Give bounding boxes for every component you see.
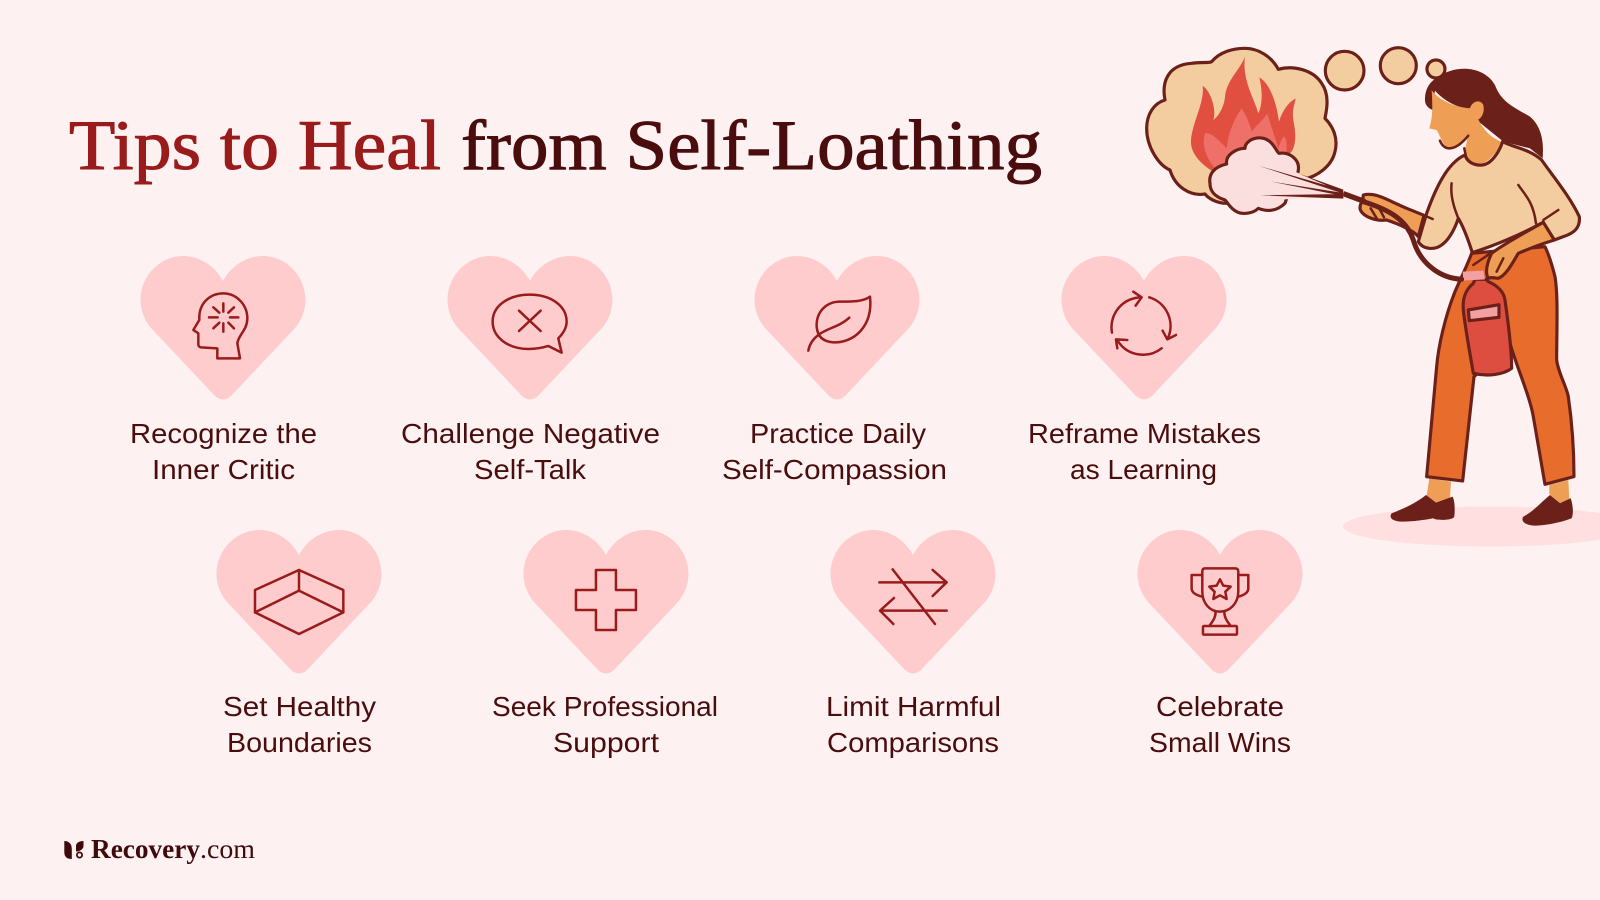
label: Self-Talk — [474, 454, 587, 485]
spray lines — [1258, 166, 1343, 199]
label: Seek Professional — [492, 691, 718, 722]
icon: head with burst — [193, 293, 247, 358]
flame outer — [1191, 57, 1296, 172]
heart — [448, 256, 612, 400]
woman — [1343, 69, 1579, 526]
icon: leaf — [808, 297, 870, 351]
spray cloud — [1210, 138, 1343, 213]
sweater creases — [1451, 183, 1558, 223]
thought circles — [1325, 51, 1364, 90]
face and neck — [1429, 90, 1502, 166]
heart — [524, 530, 688, 674]
tip: Limit Harmful Comparisons — [826, 530, 1001, 758]
heart — [830, 530, 996, 674]
finger line — [1497, 258, 1503, 272]
trousers — [1427, 247, 1574, 484]
tip: Celebrate Small Wins — [1138, 530, 1302, 758]
label: Reframe Mistakes — [1028, 418, 1261, 449]
label: Set Healthy — [223, 691, 376, 722]
icon: speech bubble with x — [493, 295, 567, 353]
label: Self-Compassion — [722, 454, 947, 485]
thought bubble with flames — [1147, 48, 1445, 203]
label: Small Wins — [1149, 727, 1291, 758]
trousers and feet — [1391, 247, 1574, 526]
forearm and hand on extinguisher — [1487, 222, 1554, 278]
label: Limit Harmful — [826, 691, 1001, 722]
label: Practice Daily — [750, 418, 926, 449]
extinguisher label — [1468, 305, 1499, 321]
cuff line and fingers — [1371, 207, 1433, 219]
label: Support — [553, 727, 659, 758]
icon: open box — [255, 570, 343, 634]
label: Recognize the — [130, 418, 317, 449]
jaw line — [1440, 136, 1468, 157]
sweater — [1418, 142, 1579, 253]
label: Comparisons — [827, 727, 999, 758]
icon: medical cross — [576, 570, 636, 630]
hose — [1363, 202, 1462, 279]
heart — [754, 256, 920, 400]
tip: Practice Daily Self-Compassion — [722, 256, 947, 485]
icon: logo leaves — [64, 841, 84, 859]
heart — [1138, 530, 1302, 674]
illustration: woman extinguishing fire in her thoughts — [1147, 48, 1579, 526]
flame inner — [1204, 108, 1287, 168]
forearm and hand holding hose — [1360, 194, 1424, 237]
tip: Recognize the Inner Critic — [130, 256, 317, 485]
icon: trophy — [1192, 568, 1248, 635]
extinguisher body — [1463, 279, 1512, 375]
heart — [216, 530, 382, 674]
right ankle — [1549, 480, 1569, 504]
spray stream — [1284, 172, 1343, 199]
tip: Challenge Negative Self-Talk — [401, 256, 660, 485]
wordmark: Recovery — [91, 834, 201, 864]
label: Challenge Negative — [401, 418, 660, 449]
title: Tips to Heal — [69, 107, 441, 185]
left ankle — [1427, 478, 1451, 503]
extinguisher cap — [1463, 271, 1485, 281]
ground shadow — [1343, 506, 1600, 546]
hair — [1425, 69, 1543, 158]
title: from Self-Loathing — [461, 107, 1042, 185]
wordmark: .com — [200, 834, 255, 864]
extinguisher handle — [1473, 254, 1489, 265]
label: Inner Critic — [152, 454, 295, 485]
cloud — [1147, 48, 1336, 203]
label: Celebrate — [1156, 691, 1284, 722]
heart — [140, 256, 306, 400]
icon: crossed arrows — [879, 569, 947, 624]
label: as Learning — [1070, 454, 1217, 485]
tip: Seek Professional Support — [492, 530, 718, 758]
tip: Reframe Mistakes as Learning — [1028, 256, 1261, 485]
label: Boundaries — [227, 727, 372, 758]
logo: Recovery.com — [64, 834, 255, 864]
right shoe — [1522, 495, 1573, 526]
spray fill — [1210, 138, 1298, 213]
heart — [1062, 256, 1226, 400]
nozzle — [1343, 194, 1365, 202]
tip: Set Healthy Boundaries — [216, 530, 382, 758]
icon: cycle arrows — [1111, 292, 1176, 355]
left shoe — [1391, 495, 1455, 522]
